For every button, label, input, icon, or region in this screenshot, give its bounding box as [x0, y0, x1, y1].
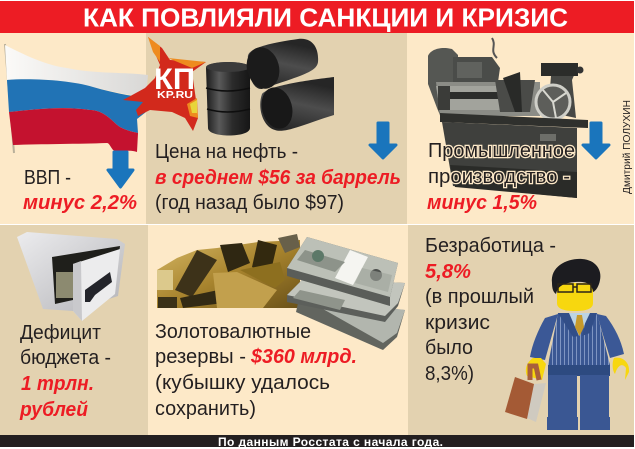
head — [557, 283, 593, 311]
text block: reserves: резервы - — [155, 346, 246, 368]
text block: GDP: ВВП - — [24, 167, 71, 189]
icon: russian flag — [5, 44, 148, 153]
left leg — [547, 375, 578, 430]
text block: budget deficit: рублей — [19, 399, 88, 421]
glasses — [558, 284, 591, 292]
icon: lathe machine — [428, 38, 588, 198]
text block: unemployment: (в прошлый — [425, 286, 534, 308]
text block: budget deficit: Дефицит — [20, 322, 101, 344]
icon: gold bars — [157, 234, 300, 308]
text block: reserves: сохранить) — [155, 398, 256, 420]
text block: oil price: Цена на нефть - — [155, 141, 298, 163]
text block: reserves: (кубышку удалось — [155, 372, 330, 394]
icon: oil barrels — [206, 39, 334, 136]
text block: industry: производство - — [428, 166, 570, 188]
text block: unemployment: Безработица - — [425, 235, 556, 257]
text block: GDP: минус 2,2% — [23, 192, 137, 214]
icon: KP logo splash: KP.RU — [157, 90, 193, 101]
text block: unemployment: было — [425, 337, 473, 359]
icon: KP logo splash: КП — [154, 63, 195, 96]
title banner: КАК ПОВЛИЯЛИ САНКЦИИ И КРИЗИС — [83, 2, 568, 32]
text block: industry: Промышленное — [428, 140, 575, 162]
briefcase side — [527, 383, 546, 422]
briefcase handle — [530, 366, 539, 380]
hips — [548, 365, 610, 376]
icon: down arrow 3 — [583, 123, 609, 158]
text block: unemployment: 8,3%) — [425, 363, 474, 385]
vertical credit: Дмитрий ПОЛУХИН — [621, 100, 633, 194]
text block: industry — [427, 140, 575, 214]
text block: reserves: Золотовалютные — [155, 321, 311, 343]
right hand — [613, 358, 629, 380]
text block: budget deficit: 1 трлн. — [21, 373, 94, 395]
lapels — [558, 313, 597, 337]
text block: reserves — [155, 321, 357, 420]
right leg — [580, 375, 610, 430]
text block: unemployment: кризис — [425, 312, 490, 334]
hair — [552, 259, 600, 294]
left hand — [526, 358, 546, 380]
shirt and tie — [569, 313, 590, 336]
text block: budget deficit — [19, 322, 111, 421]
icon: safe — [17, 232, 125, 321]
text block: GDP — [23, 167, 137, 214]
text block: reserves: $360 млрд. — [250, 346, 357, 368]
icon: down arrow 1 — [108, 152, 133, 187]
icon: dollar stacks — [287, 237, 405, 350]
icon: lego businessman — [505, 259, 629, 430]
text block: unemployment: 5,8% — [425, 261, 471, 283]
text block: oil price: (год назад было $97) — [155, 192, 344, 214]
text block: unemployment — [425, 235, 556, 385]
icon: down arrow 2 — [370, 123, 396, 158]
text block: budget deficit: бюджета - — [20, 347, 111, 369]
briefcase — [505, 377, 534, 419]
text block: industry: минус 1,5% — [427, 192, 537, 214]
footer bar: По данным Росстата с начала года. — [218, 435, 443, 449]
text block: oil price: в среднем $56 за баррель — [155, 167, 401, 189]
torso — [548, 313, 610, 365]
left arm — [530, 314, 558, 360]
footer bar — [0, 435, 634, 449]
icon: KP logo splash — [123, 37, 206, 131]
text block: oil price — [155, 141, 401, 214]
right arm — [597, 314, 624, 358]
